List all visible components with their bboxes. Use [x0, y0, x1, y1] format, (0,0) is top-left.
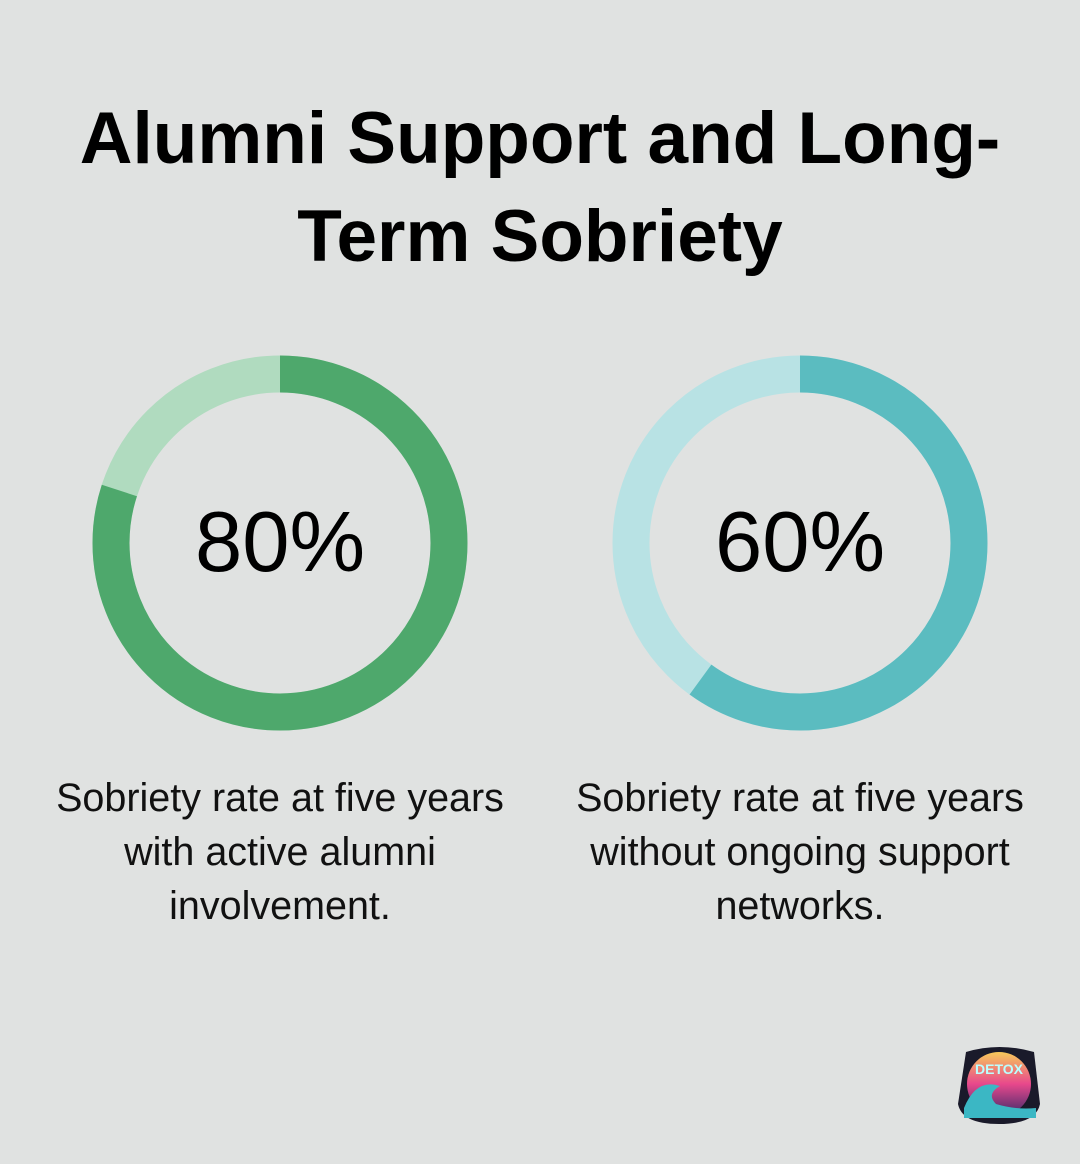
caption: 80%: Sobriety rate at five years with active alumni involvement.: [56, 776, 504, 928]
donut chart: 60%: 60%: [715, 495, 885, 590]
title: [80, 98, 1000, 277]
icon: logo: [958, 1047, 1040, 1124]
donut chart: 60%: [612, 356, 988, 730]
donut chart: 80%: 80%: [195, 495, 365, 590]
donut chart: 80%: [92, 356, 468, 730]
title: Alumni Support and Long-: [80, 98, 1000, 179]
icon: logo: DETOX: [975, 1061, 1024, 1077]
caption: 60%: Sobriety rate at five years without ongoing support networks.: [576, 776, 1024, 928]
title: Term Sobriety: [297, 196, 783, 277]
